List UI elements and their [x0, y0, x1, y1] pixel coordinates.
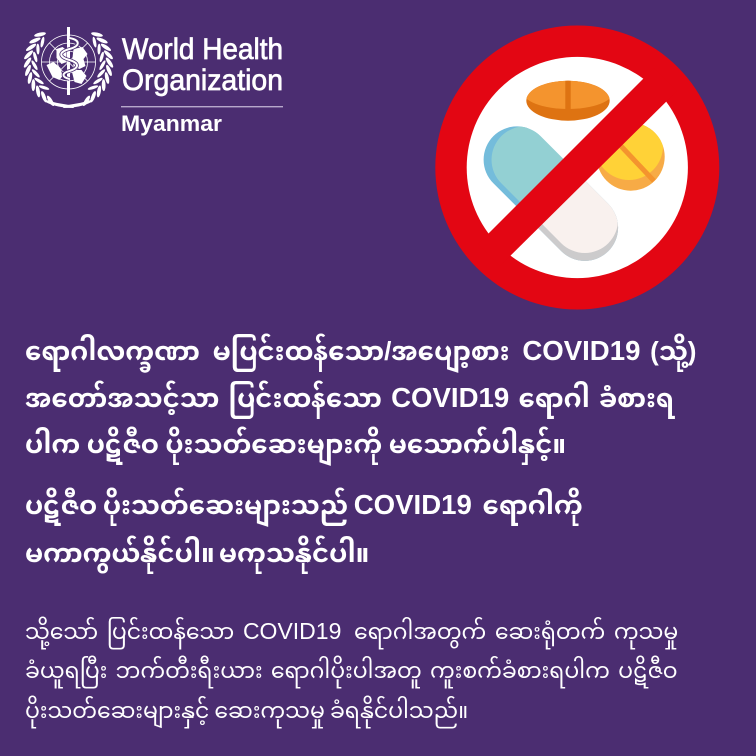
icon: capsule: [484, 126, 618, 261]
logo: World Health Organization Myanmar: [24, 27, 283, 136]
prohibition bar: [478, 68, 677, 266]
heading: antibiotics do not prevent or cure COVID19: ပဋိဇီဝ ပိုးသတ်ဆေးများသည် COVID19 ရောဂါကို: [25, 489, 583, 520]
wreath: [23, 31, 114, 108]
icon: orange tablet: [526, 80, 610, 121]
text block: severe COVID19 treatment note: သို့သော် ပြင်းထန်သော COVID19 ရောဂါအတွက် ဆေးရုံတက် ကုသမှု: [25, 618, 678, 644]
text block: severe COVID19 treatment note: ပိုးသတ်ဆေးများနှင့် ဆေးကုသမှု ခံရနိုင်ပါသည်။: [25, 698, 468, 723]
heading: antibiotics do not prevent or cure COVID19: မကာကွယ်နိုင်ပါ။ မကုသနိုင်ပါ။: [25, 538, 369, 568]
organization name: World Health: [122, 33, 283, 66]
organization name: Organization: [122, 64, 283, 97]
text block: severe COVID19 treatment note: [25, 616, 678, 728]
heading: do not take antibiotics: အတော်အသင့်သာ ပြင်းထန်သော COVID19 ရောဂါ ခံစားရ: [25, 382, 674, 413]
country name: Myanmar: [121, 111, 222, 136]
icon: no antibiotics prohibition sign with pills: [435, 26, 720, 310]
heading: do not take antibiotics: ရောဂါလက္ခဏာ မပြင်းထန်သော/အပျော့စား COVID19 (သို့): [25, 335, 696, 366]
heading: do not take antibiotics: ပါက ပဋိဇီဝ ပိုးသတ်ဆေးများကို မသောက်ပါနှင့်။: [25, 429, 566, 459]
heading: do not take antibiotics: [25, 334, 696, 466]
icon: WHO emblem: [23, 27, 114, 108]
organization name: [122, 33, 283, 97]
text block: severe COVID19 treatment note: ခံယူရပြီး ဘက်တီးရီးယား ရောဂါပိုးပါအတူ ကူးစက်ခံစားရပါက ပဋိဇီဝ: [25, 658, 678, 683]
icon: yellow tablet: [598, 124, 665, 191]
heading: antibiotics do not prevent or cure COVID19: [25, 488, 583, 574]
